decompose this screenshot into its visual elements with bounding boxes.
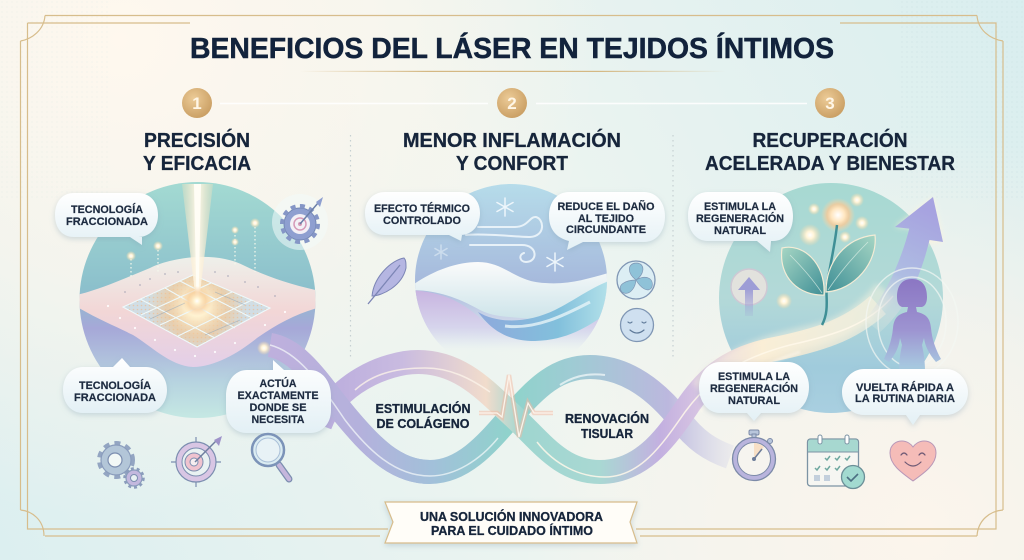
callout: reduce el daño: AL TEJIDO — [578, 213, 634, 225]
heading: recuperación acelerada y bienestar: ACELERADA Y BIENESTAR — [705, 153, 956, 175]
callout: estimula la regeneración (bottom): ESTIMULA LA — [718, 371, 790, 383]
laser beam — [182, 184, 213, 302]
wind swirls — [466, 217, 542, 262]
callout: estimula la regeneración (top): REGENERACIÓN — [696, 212, 784, 225]
illustration: cooling circle — [415, 184, 607, 344]
icon: stopwatch — [732, 430, 776, 480]
callout: actúa exactamente donde se necesita: EXACTAMENTE — [238, 390, 318, 402]
icon: seedling — [782, 225, 875, 325]
icon: growth arrow — [865, 197, 943, 332]
icon: target with arrow — [171, 436, 222, 487]
column dividers — [350, 135, 673, 360]
treatment grid — [122, 274, 271, 348]
label: renovación tisular: TISULAR — [581, 426, 634, 441]
callout: efecto térmico controlado: CONTROLADO — [383, 215, 461, 227]
icon: gears — [99, 443, 144, 488]
callout: estimula la regeneración (top): ESTIMULA LA — [704, 201, 776, 213]
icon: gear with target — [272, 194, 328, 250]
banner: una solución innovadora: UNA SOLUCIÓN INNOVADORA — [420, 509, 603, 524]
callout: tecnología fraccionada (top): TECNOLOGÍA — [71, 203, 143, 216]
callout: vuelta rápida a la rutina diaria: VUELTA RÁPIDA A — [856, 381, 954, 394]
illustration: recovery circle — [719, 183, 943, 413]
collagen ribbon strand A — [270, 345, 730, 472]
callout: vuelta rápida a la rutina diaria: LA RUTINA DIARIA — [855, 393, 955, 405]
heading: precisión y eficacia — [143, 128, 251, 175]
icon: woman silhouette — [866, 268, 958, 376]
label: estimulación de colágeno: DE COLÁGENO — [376, 416, 470, 431]
heartbeat line — [479, 375, 553, 437]
callout: tecnología fraccionada (bottom): FRACCIONADA — [74, 392, 156, 404]
step badge 3: 3 — [825, 94, 835, 113]
glowing particles — [776, 193, 869, 309]
heading: menor inflamación y confort: MENOR INFLAMACIÓN — [403, 128, 621, 152]
title: BENEFICIOS DEL LÁSER EN TEJIDOS ÍNTIMOS — [190, 31, 834, 65]
illustration: laser on skin circle — [72, 182, 325, 418]
step badge 1 — [182, 88, 212, 118]
callout: actúa exactamente donde se necesita: DONDE SE — [250, 402, 306, 414]
callout: estimula la regeneración (top) — [688, 192, 793, 252]
callout: tecnología fraccionada (top) — [55, 193, 158, 245]
label: renovación tisular: RENOVACIÓN — [565, 411, 649, 426]
heading: precisión y eficacia: PRECISIÓN — [144, 128, 250, 152]
callout: vuelta rápida a la rutina diaria — [842, 369, 968, 425]
step badge 3 — [815, 88, 845, 118]
step connector lines — [220, 102, 807, 104]
callout: actúa exactamente donde se necesita: NECESITA — [252, 414, 305, 426]
callout: efecto térmico controlado: EFECTO TÉRMICO — [374, 202, 470, 215]
callout: estimula la regeneración (bottom) — [699, 362, 809, 421]
callout: tecnología fraccionada (bottom): TECNOLOGÍA — [79, 379, 151, 392]
icon: smiling heart — [890, 441, 936, 481]
small up arrow badge — [731, 269, 767, 316]
label: estimulación de colágeno: ESTIMULACIÓN — [376, 401, 470, 416]
heading: recuperación acelerada y bienestar: RECUPERACIÓN — [752, 128, 908, 152]
callout: reduce el daño: REDUCE EL DAÑO — [558, 200, 655, 213]
callout: tecnología fraccionada (bottom) — [63, 358, 167, 413]
heading: menor inflamación y confort: Y CONFORT — [456, 153, 568, 175]
lower lilac area — [416, 290, 598, 337]
skin surface — [72, 257, 325, 367]
ribbon strand B rising into arrow — [320, 290, 893, 477]
callout: tecnología fraccionada (top): FRACCIONADA — [66, 216, 148, 228]
icon: calendar with check — [808, 435, 864, 488]
icon: feather — [368, 258, 406, 304]
step badge 2 — [497, 88, 527, 118]
snowflakes — [435, 198, 563, 271]
rising particles — [126, 218, 260, 278]
heading: recuperación acelerada y bienestar — [705, 128, 956, 175]
heading: menor inflamación y confort — [403, 128, 621, 175]
icon: magnifier — [252, 434, 289, 479]
callout: actúa exactamente donde se necesita: ACTÚA — [260, 377, 297, 390]
callout: efecto térmico controlado — [365, 192, 480, 241]
label: estimulación de colágeno — [376, 401, 470, 431]
callout: actúa exactamente donde se necesita — [226, 360, 331, 433]
icon: fan — [617, 261, 655, 299]
blue waves — [478, 280, 612, 341]
callout: reduce el daño: CIRCUNDANTE — [566, 224, 646, 236]
white blanket — [415, 262, 607, 318]
callout: reduce el daño — [549, 192, 665, 250]
scattered pores — [124, 271, 276, 297]
step badge 1: 1 — [192, 94, 202, 113]
callout: estimula la regeneración (bottom): REGENERACIÓN — [710, 382, 798, 395]
callout: estimula la regeneración (bottom): NATURAL — [728, 395, 780, 407]
icon: calm face — [620, 308, 654, 342]
callout: estimula la regeneración (top): NATURAL — [714, 225, 766, 237]
heading: precisión y eficacia: Y EFICACIA — [143, 153, 251, 175]
banner: una solución innovadora: PARA EL CUIDADO ÍNTIMO — [431, 523, 593, 538]
ribbon strand A overlap at left crossing — [257, 341, 498, 476]
step badge 2: 2 — [507, 94, 517, 113]
label: renovación tisular — [565, 411, 649, 441]
banner: una solución innovadora — [385, 502, 637, 543]
